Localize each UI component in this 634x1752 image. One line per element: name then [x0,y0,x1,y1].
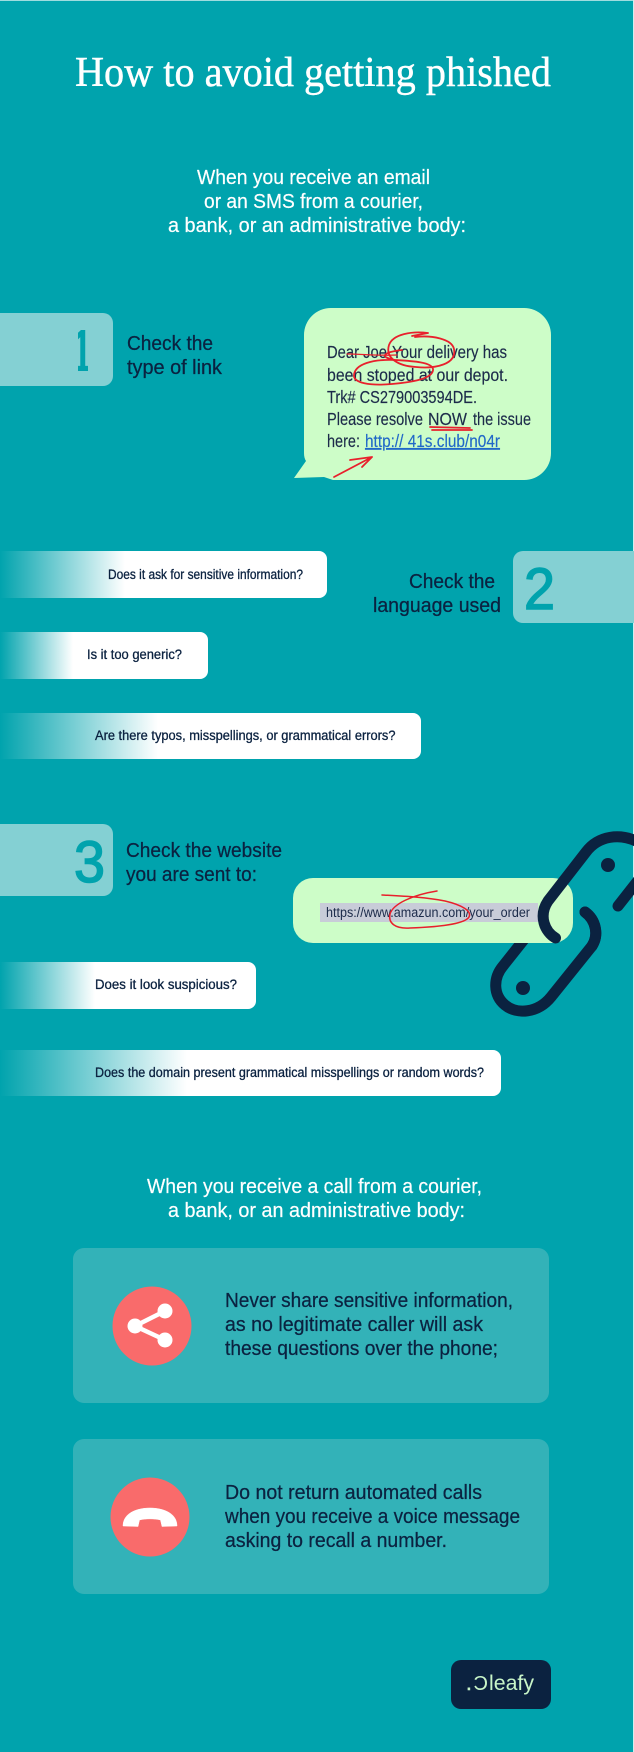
icon: hang up phone [110,1478,190,1556]
message text: been stoped at our depot. [327,365,508,385]
intro text: email or SMS: or an SMS from a courier, [204,190,423,213]
question bar: looks suspicious [0,962,256,1009]
question bar: sensitive information [0,551,327,598]
icon: share [112,1286,192,1366]
message text: Please resolve [327,409,423,429]
step 2 heading [373,570,501,617]
question bar: typos: Are there typos, misspellings, or grammatical errors? [95,728,396,743]
question bar: too generic [0,632,208,679]
step 1: check the type of link [0,313,223,386]
intro text: email or SMS [168,166,466,237]
step 3: check the website [0,824,282,896]
step 2 heading: Check the [409,570,495,593]
URL pill background [293,878,573,943]
card text: these questions over the phone; [225,1337,498,1360]
intro text: email or SMS: When you receive an email [197,166,430,189]
question bar: typos [0,713,421,759]
step 3 heading: you are sent to: [126,863,257,886]
step 3 heading [126,839,282,886]
card text: when you receive a voice message [224,1505,520,1528]
panel: do not return automated calls [73,1439,549,1594]
icon: chain link, upper piece and dots [516,837,634,995]
logo: Cleafy [451,1660,551,1709]
question bar: sensitive information: Does it ask for sensitive information? [108,567,303,582]
question bar: too generic: Is it too generic? [87,647,182,662]
card text [224,1481,520,1552]
intro text: phone call: a bank, or an administrative body: [168,1199,465,1222]
step 1 number badge [0,313,113,386]
message text: Your delivery has [392,342,507,362]
message text: Dear Joe [327,342,387,362]
red annotations [334,332,472,477]
message text: here: [327,431,360,451]
panel: never share sensitive information [73,1248,549,1403]
question bar: domain misspellings: Does the domain present grammatical misspellings or random words? [95,1065,484,1080]
message text: NOW [428,409,467,429]
intro text: phone call: When you receive a call from a courier, [147,1175,482,1198]
card text: as no legitimate caller will ask [225,1313,484,1336]
step 2 heading: language used [373,594,501,617]
message text: http:// 41s.club/n04r [365,431,500,451]
step 1 heading: Check the [127,332,213,355]
title: How to avoid getting phished [75,50,551,96]
step 2 number badge [513,551,634,623]
highlighted URL: https://www.amazun.com/your_order [326,905,530,920]
card background [73,1439,549,1594]
question bar: domain misspellings [0,1050,501,1096]
URL bubble [293,878,573,943]
step 1 heading: type of link [127,356,223,379]
question bar: looks suspicious: Does it look suspicious? [95,977,237,992]
step 3 heading: Check the website [126,839,282,862]
card text: Never share sensitive information, [225,1289,513,1312]
card text [225,1289,513,1360]
step 1 heading [127,332,223,379]
SMS bubble with annotated message [294,308,551,480]
bubble shape [294,308,551,480]
step 3 number badge [0,824,113,896]
logo: Cleafy: leafy [489,1672,535,1695]
intro text: email or SMS: a bank, or an administrative body: [168,214,466,237]
card text: Do not return automated calls [225,1481,482,1504]
logo: Cleafy: . [466,1672,472,1695]
step 2: check the language used [373,551,634,623]
card text: asking to recall a number. [225,1529,447,1552]
message text: Trk# CS279003594DE. [327,387,477,407]
message text [327,342,531,451]
red annotation on domain [382,891,470,928]
card background [73,1248,549,1403]
step 2 number badge: 2 [524,557,555,622]
step 3 number badge: 3 [74,830,105,895]
logo: Cleafy: C [474,1673,488,1695]
step 1 number badge: 1 [70,319,94,384]
icon: chain link, lower piece [496,912,596,1011]
message text: the issue [473,409,531,429]
intro text: phone call [147,1175,482,1222]
